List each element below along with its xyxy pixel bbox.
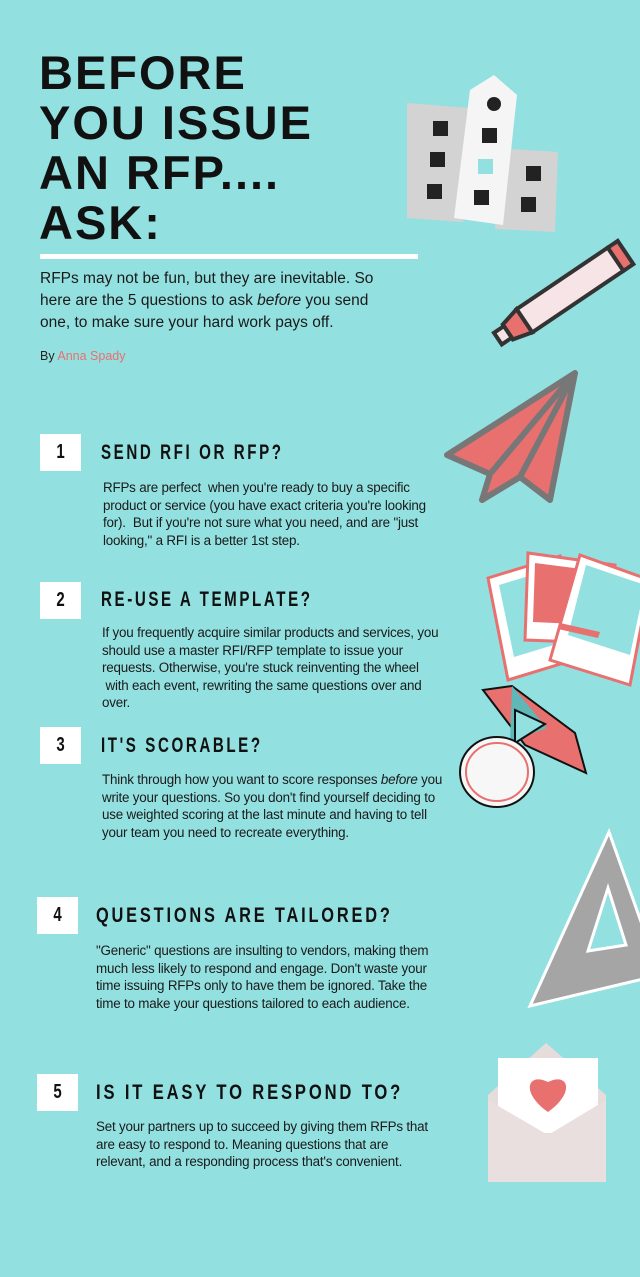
title: AN RFP.... xyxy=(39,146,280,199)
section 2 xyxy=(40,582,438,710)
text 1: for). But if you're not sure what you need, and are "just xyxy=(103,515,418,530)
title: YOU ISSUE xyxy=(39,96,313,149)
icon: photos xyxy=(488,553,640,685)
heading 1: SEND RFI OR RFP? xyxy=(101,441,284,464)
text 2: over. xyxy=(102,695,130,710)
number 3 xyxy=(40,727,81,764)
title: BEFORE xyxy=(39,46,247,99)
icon: medal xyxy=(460,686,586,807)
intro text xyxy=(40,270,373,331)
icon: paper plane xyxy=(447,373,575,500)
text 5: Set your partners up to succeed by giving them RFPs that xyxy=(96,1119,428,1134)
number 1: 1 xyxy=(56,441,65,463)
intro text: RFPs may not be fun, but they are inevitable. So xyxy=(40,270,373,287)
section 5 xyxy=(37,1074,428,1169)
icon: set square xyxy=(530,832,640,1006)
number 5 xyxy=(37,1074,78,1111)
text 1: looking," a RFI is a better 1st step. xyxy=(103,532,300,548)
text 1: product or service (you have exact criteria you're looking xyxy=(103,498,426,512)
text 2: with each event, rewriting the same questions over and xyxy=(106,678,421,692)
text 4: "Generic" questions are insulting to vendors, making them xyxy=(96,943,428,958)
section 1 xyxy=(40,434,426,548)
number 5: 5 xyxy=(53,1081,62,1103)
text 3 xyxy=(102,772,442,840)
intro text: here are the 5 questions to ask before you send xyxy=(40,292,368,309)
number 4 xyxy=(37,897,78,934)
text 2: should use a master RFI/RFP template to issue your xyxy=(102,642,403,658)
number 2 xyxy=(40,582,81,619)
text 5: are easy to respond to. Meaning questions that are xyxy=(96,1136,388,1152)
text 3: Think through how you want to score responses before you xyxy=(102,772,442,787)
text 5 xyxy=(96,1119,428,1169)
text 3: your team you need to recreate everything. xyxy=(102,824,349,840)
text 3: use weighted scoring at the last minute and having to tell xyxy=(102,807,427,822)
heading 3: IT'S SCORABLE? xyxy=(101,734,263,757)
text 4: much less likely to respond and engage. Don't waste your xyxy=(96,960,427,976)
icon: envelope with heart xyxy=(488,1043,606,1182)
byline: By Anna Spady xyxy=(40,349,125,363)
text 4 xyxy=(96,943,428,1011)
text 4: time to make your questions tailored to each audience. xyxy=(96,996,410,1010)
title xyxy=(39,46,313,249)
text 5: relevant, and a responding process that's convenient. xyxy=(96,1154,402,1169)
text 1: RFPs are perfect when you're ready to buy a specific xyxy=(103,480,410,495)
text 2 xyxy=(102,625,438,710)
number 3: 3 xyxy=(56,734,65,756)
heading 2: RE-USE A TEMPLATE? xyxy=(101,588,313,611)
icon: building xyxy=(407,75,558,232)
section 3 xyxy=(40,727,442,840)
number 4: 4 xyxy=(53,904,62,926)
text 2: If you frequently acquire similar products and services, you xyxy=(102,625,438,640)
text 1 xyxy=(103,480,426,548)
intro text: one, to make sure your hard work pays off. xyxy=(40,314,334,331)
title: ASK: xyxy=(39,196,162,249)
section 4 xyxy=(37,897,428,1011)
number 1 xyxy=(40,434,81,471)
text 2: requests. Otherwise, you're stuck reinventing the wheel xyxy=(102,660,419,675)
heading 4: QUESTIONS ARE TAILORED? xyxy=(96,904,393,927)
heading 5: IS IT EASY TO RESPOND TO? xyxy=(96,1081,403,1104)
icon: marker xyxy=(490,241,633,350)
text 4: time issuing RFPs only to have them be ignored. Take the xyxy=(96,978,427,993)
number 2: 2 xyxy=(56,589,65,611)
text 3: write your questions. So you don't find yourself deciding to xyxy=(102,790,435,804)
